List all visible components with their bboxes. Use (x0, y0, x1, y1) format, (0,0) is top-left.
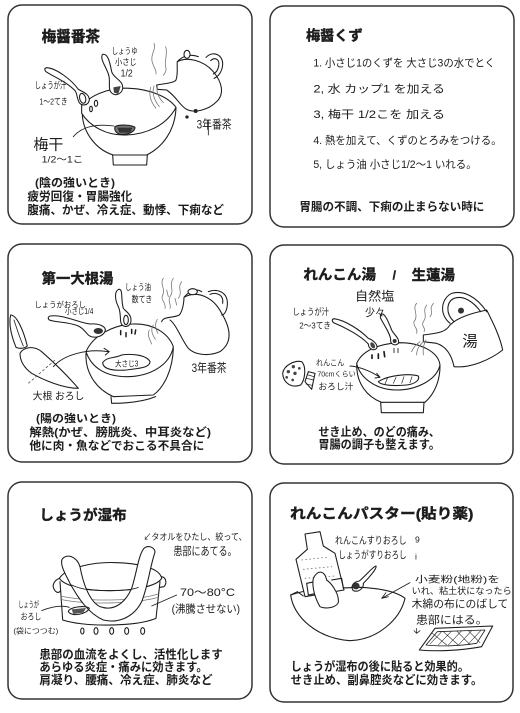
icon: teapot (148, 278, 229, 355)
text: 効能: せき止め、副鼻腔炎などに効きます。 (291, 673, 482, 687)
label: しょうがおろし: しょうが (18, 598, 39, 609)
label: しょうがおろし: (袋につつむ) (13, 626, 58, 635)
label: 作り方: いれ、粘土状になったら (412, 585, 512, 596)
heading: しょうが湿布: しょうが湿布 (39, 507, 127, 523)
heading: 梅醤くず: 梅醤くず (306, 28, 363, 44)
icon: lotus root (283, 361, 315, 389)
panel: 第一大根湯 (8, 244, 252, 462)
label: しょうゆ: 数てき (132, 293, 152, 304)
label: すりおろし: しょうがすりおろし (338, 549, 407, 562)
panel: しょうが湿布 (8, 482, 252, 699)
label: 温度: 70〜80°C (180, 587, 235, 599)
panel: 梅醤番茶 (8, 5, 252, 224)
label: タオル (143, 531, 247, 558)
icon: bowl: 大さじ3 (115, 359, 139, 369)
heading: れんこん湯 / 生蓮湯 (303, 266, 455, 284)
label: すりおろし: れんこんすりおろし (335, 535, 407, 547)
text: 効能: しょうが湿布の後に貼ると効果的。 (291, 660, 469, 674)
label: しょうゆ: 小さじ (115, 57, 137, 67)
label: 作り方: 患部にはる。 (416, 614, 488, 626)
icon: kettle (412, 292, 503, 367)
text: 効能: 肩凝り、腰痛、冷え症、肺炎など (39, 673, 213, 687)
text: 効能: あらゆる炎症・痛みに効きます。 (39, 660, 208, 674)
label: しょうがおろし: おろし (21, 611, 41, 621)
text: 効能: (陰の強いとき) (35, 176, 115, 190)
label: 三年番茶 (197, 118, 232, 135)
label: しょうが: しょうがおろし (34, 300, 86, 310)
text: 効能: 胃腸の不調、下痢の止まらない時に (299, 199, 484, 213)
label: しょうゆ: 1/2 (121, 69, 133, 80)
steps list: 3, 梅干 1/2こを 加える (313, 108, 445, 121)
heading: 梅醤番茶: 梅醤番茶 (42, 28, 100, 46)
text: 効能 (29, 411, 211, 452)
steps list: 1. 小さじ1のくずを 大さじ3の水でとく (313, 57, 495, 70)
steps list: 4. 熱を加えて、くずのとろみをつける。 (313, 134, 502, 147)
icon: ginger spoon (48, 316, 105, 337)
heading: れんこん湯 / 生蓮湯: / (393, 268, 397, 282)
heading: れんこん湯 / 生蓮湯: れんこん湯 (303, 266, 376, 282)
text: 効能: 腹痛、かぜ、冷え症、動悸、下痢など (27, 203, 224, 217)
label: れんこん: れんこん (316, 358, 344, 367)
heading: れんこん湯 / 生蓮湯: 生蓮湯 (412, 267, 455, 284)
label: しょうが汁 (35, 79, 68, 107)
icon: bowl (350, 343, 440, 413)
label: しょうが汁: 2〜3てき (299, 320, 331, 330)
panel: れんこんパスター (270, 483, 513, 702)
label: 温度: (沸騰させない) (172, 603, 240, 616)
text: 効能 (39, 647, 223, 687)
label: れんこん (316, 358, 356, 391)
label: タオル: 患部にあてる。 (173, 545, 237, 558)
label: 温度 (152, 587, 240, 616)
label: れんこん: おろし汁 (318, 380, 354, 391)
label: しょうゆ: しょうゆ (112, 46, 138, 56)
icon: salt spoon (380, 314, 399, 353)
label: 自然塩: 少々 (365, 306, 385, 319)
label: しょうゆ (125, 281, 152, 304)
label: しょうが汁 (292, 306, 331, 330)
icon: bowl with grater (291, 532, 405, 641)
text: 効能: 他に肉・魚などでおこる不具合に (29, 438, 204, 452)
label: 作り方: 小麦粉(地粉)を (415, 574, 500, 585)
label: 大根おろし: 大根 おろし (33, 389, 84, 402)
text: 効能: (陽の強いとき) (36, 411, 116, 425)
heading: 第一大根湯: 第一大根湯 (42, 269, 113, 287)
text: 効能: 患部の血流をよくし、活性化します (39, 647, 223, 661)
label: 梅干: 1/2〜1こ (42, 155, 83, 165)
label: しょうゆ: しょう油 (125, 281, 151, 292)
icon: daikon radish (10, 315, 109, 388)
label: れんこん: 70cmくらい (317, 370, 356, 379)
icon: ginger spoon (45, 68, 98, 112)
label: すりおろし: i (415, 551, 417, 561)
text: 効能: せき止め、のどの痛み、 (318, 425, 440, 439)
icon: ginger spoon (332, 319, 385, 358)
label: しょうゆ (112, 46, 138, 80)
icon: bowl (86, 324, 173, 403)
panel: 梅醤くず (270, 6, 514, 227)
label: タオル: ↙タオルをひたし、絞って、 (143, 531, 247, 542)
text: 効能: 解熱(かぜ、膀胱炎、中耳炎など) (29, 425, 211, 439)
steps list: 5, しょう油 小さじ1/2〜1 いれる。 (313, 158, 477, 171)
label: しょうがおろし (13, 598, 69, 635)
heading: れんこんパスター(貼り薬): れんこんパスター(貼り薬) (290, 505, 473, 521)
label: しょうが: 小さじ1/4 (65, 307, 94, 316)
icon: spoon (352, 566, 376, 591)
steps list: 2, 水 カップ1 を加える (313, 84, 445, 96)
label: 作り方 (382, 574, 512, 626)
label: しょうが汁: 1〜2てき (39, 97, 68, 107)
text: 効能: 疲労回復・胃腸強化 (27, 189, 133, 203)
label: しょうが汁: しょうが汁 (292, 306, 329, 317)
text: 効能 (318, 425, 440, 452)
icon: pot with towel (53, 547, 166, 634)
icon: soy sauce spoon (115, 289, 136, 337)
label: しょうが汁: しょうが汁 (35, 79, 66, 90)
label: 三年番茶: 3年番茶 (197, 118, 232, 132)
icon: kettle: 湯 (462, 334, 478, 351)
icon: soy sauce spoon (102, 54, 123, 95)
label: 梅干: 梅干 (33, 136, 63, 153)
label: 梅干 (33, 125, 114, 165)
label: すりおろし (335, 535, 420, 562)
label: しょうが (34, 300, 94, 316)
steps list (313, 57, 502, 171)
label: 作り方: 木綿の布にのばして (412, 597, 508, 610)
label: 自然塩 (355, 289, 395, 319)
label: 三年番茶: 3年番茶 (192, 361, 227, 375)
text: 効能: 胃腸の調子も整えます。 (318, 438, 440, 452)
label: 自然塩: 自然塩 (355, 289, 395, 304)
icon: cloth poultice (414, 626, 493, 651)
icon: bowl (82, 88, 176, 165)
label: すりおろし: 9 (415, 535, 420, 545)
panel: れんこん湯 (270, 245, 513, 464)
text: 効能 (27, 176, 224, 217)
text: 効能 (291, 660, 482, 687)
icon: teapot (150, 43, 223, 119)
